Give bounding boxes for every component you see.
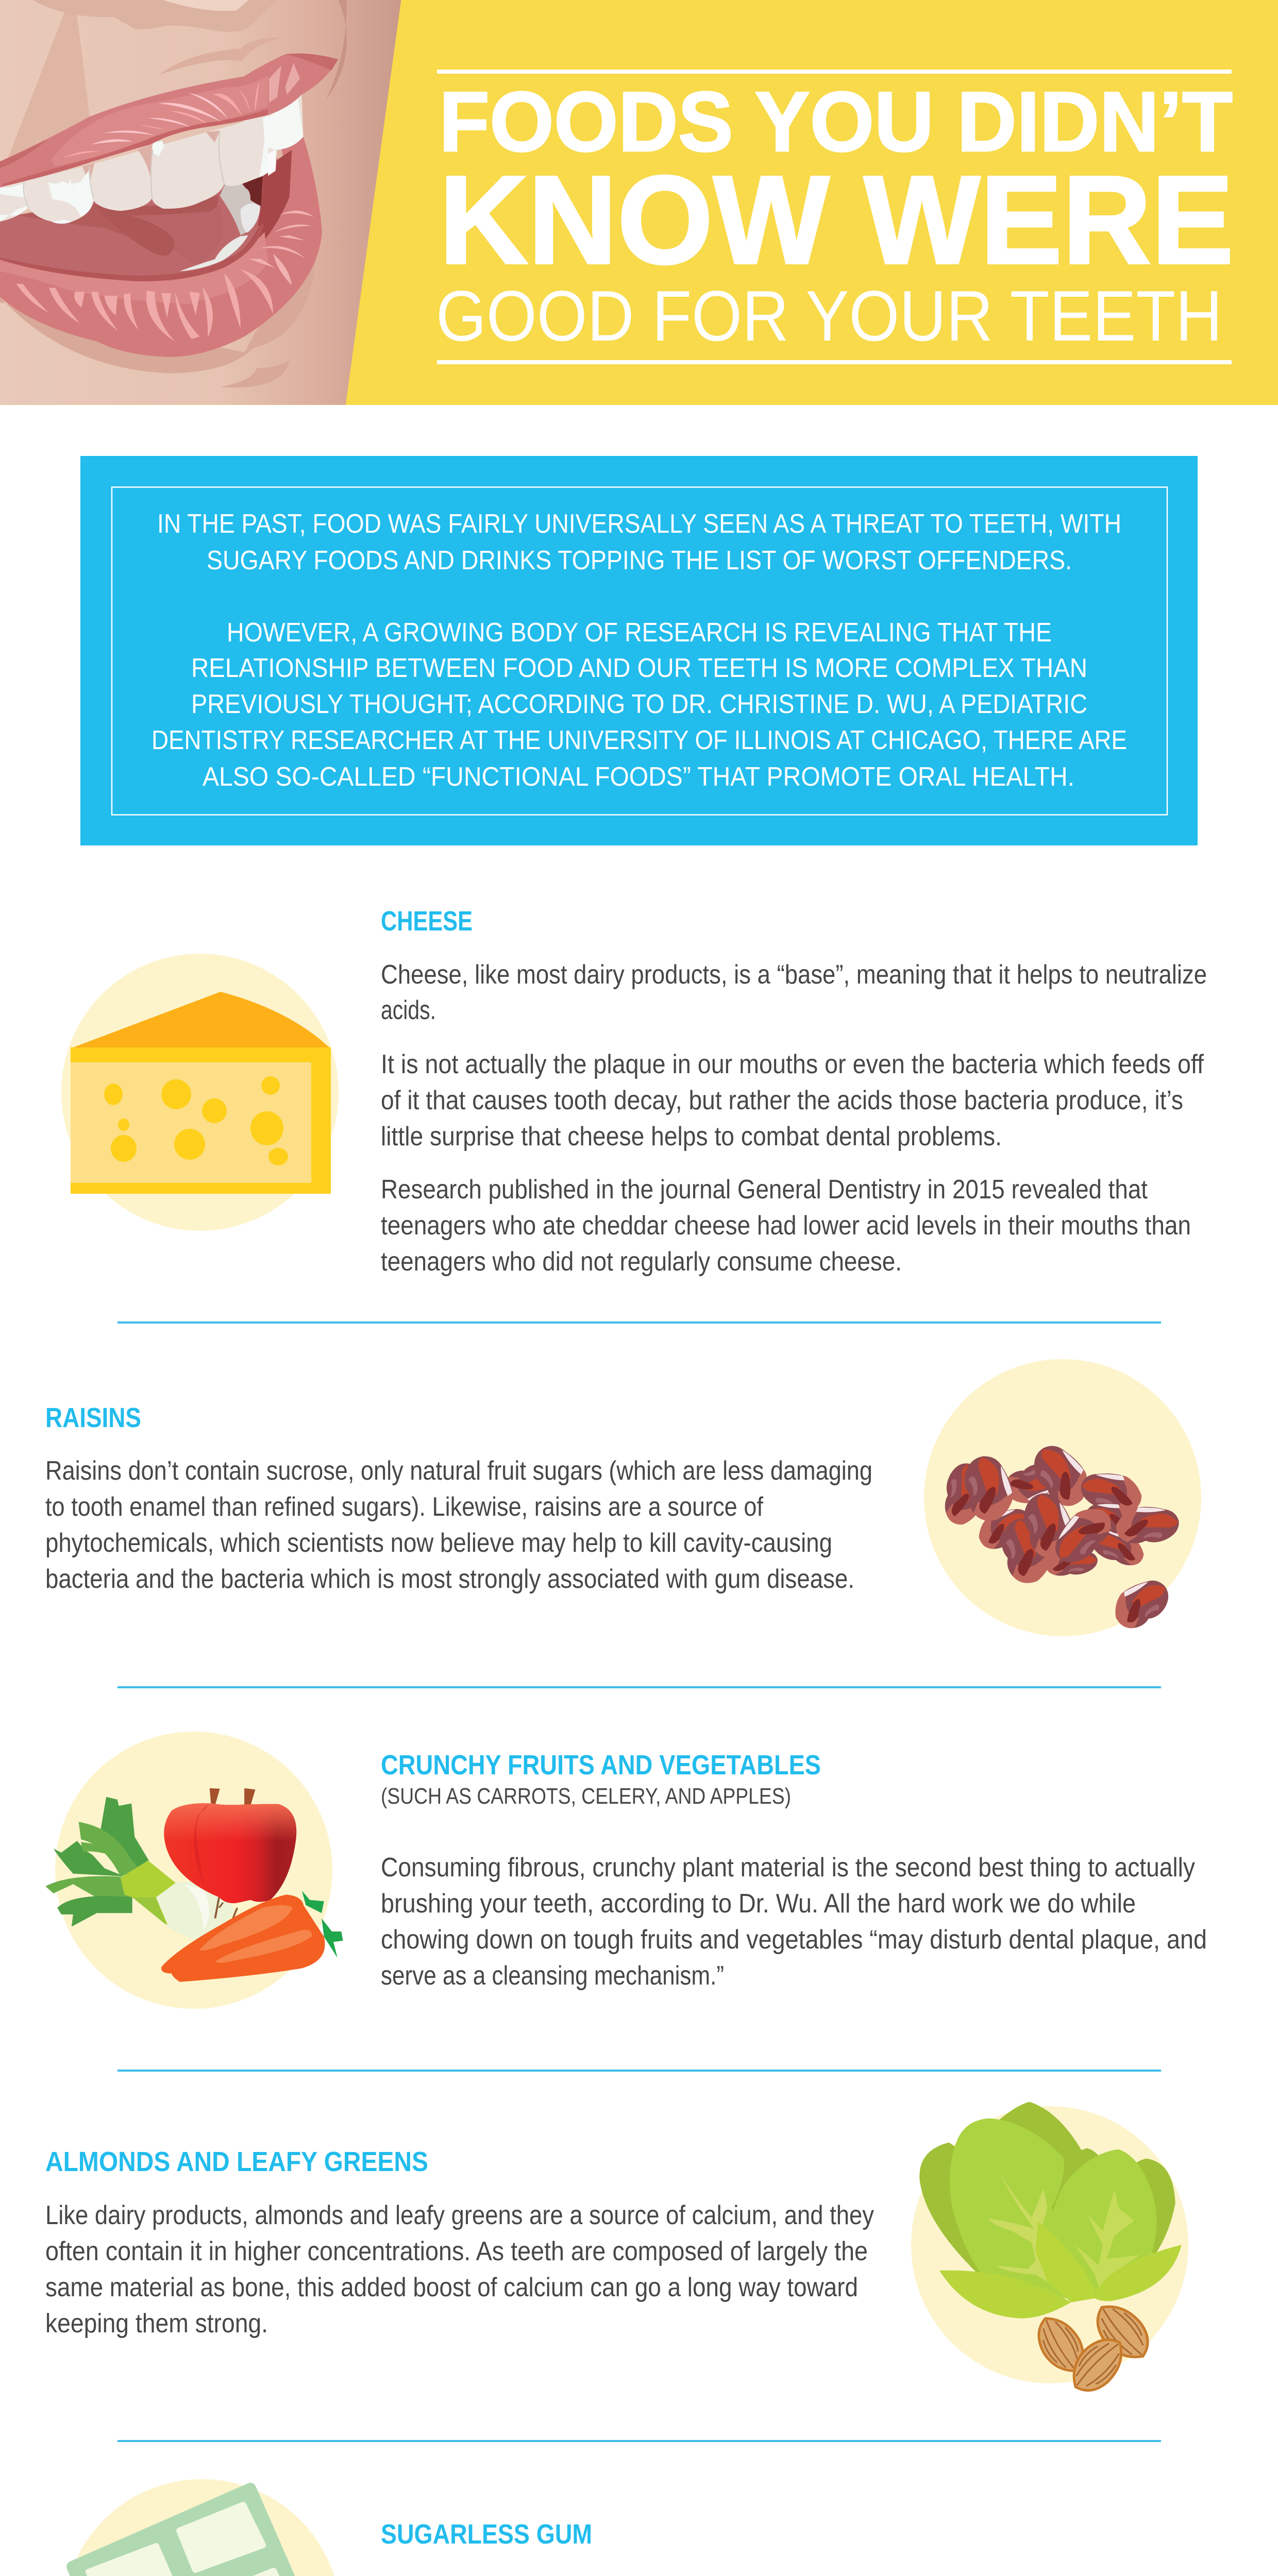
header banner: [0, 0, 1278, 405]
intro text: PREVIOUSLY THOUGHT; ACCORDING TO DR. CHRISTINE D. WU, A PEDIATRIC: [191, 689, 1087, 719]
intro text: HOWEVER, A GROWING BODY OF RESEARCH IS REVEALING THAT THE: [227, 618, 1052, 648]
text: cheese: Research published in the journal General Dentistry in 2015 revealed that: [381, 1175, 1148, 1205]
heading: crunchy fruits and vegetables: CRUNCHY FRUITS AND VEGETABLES: [381, 1750, 821, 1781]
intro text: ALSO SO-CALLED “FUNCTIONAL FOODS” THAT PROMOTE ORAL HEALTH.: [203, 762, 1074, 792]
icon: apple, celery and carrot: [45, 1732, 343, 2009]
text: raisins: phytochemicals, which scientists now believe may help to kill cavity-causing: [45, 1528, 832, 1558]
text: crunchy: Consuming fibrous, crunchy plant material is the second best thing to actually: [381, 1853, 1195, 1883]
section: crunchy fruits and vegetables: [45, 1732, 1207, 2009]
icon: raisins: [924, 1359, 1201, 1637]
text: almonds: keeping them strong.: [45, 2309, 268, 2338]
text: crunchy: brushing your teeth, according to Dr. Wu. All the hard work we do while: [381, 1889, 1136, 1919]
text: cheese: teenagers who ate cheddar cheese had lower acid levels in their mouths than: [381, 1211, 1191, 1241]
text: raisins: bacteria and the bacteria which is most strongly associated with gum disease.: [45, 1564, 854, 1594]
icon: cheese: [61, 954, 339, 1231]
title: KNOW WERE: [439, 149, 1234, 290]
text: raisins: to tooth enamel than refined sugars). Likewise, raisins are a source of: [45, 1492, 763, 1522]
text: cheese: [381, 960, 1207, 1277]
intro text: RELATIONSHIP BETWEEN FOOD AND OUR TEETH IS MORE COMPLEX THAN: [191, 653, 1087, 683]
text: almonds: same material as bone, this added boost of calcium can go a long way toward: [45, 2273, 858, 2302]
yellow title background: [0, 0, 1278, 405]
intro text: [152, 509, 1127, 792]
text: cheese: of it that causes tooth decay, but rather the acids those bacteria produce, it’s: [381, 1086, 1183, 1115]
icon: gum packet: [63, 2479, 341, 2576]
text: almonds: often contain it in higher concentrations. As teeth are composed of largely the: [45, 2236, 868, 2266]
text: cheese: It is not actually the plaque in our mouths or even the bacteria which feeds off: [381, 1049, 1204, 1079]
intro text: SUGARY FOODS AND DRINKS TOPPING THE LIST OF WORST OFFENDERS.: [207, 546, 1072, 575]
text: crunchy: chowing down on tough fruits and vegetables “may disturb dental plaque, and: [381, 1925, 1207, 1955]
illustration: smiling mouth: [0, 0, 401, 405]
text: cheese: acids.: [381, 995, 436, 1025]
text: cheese: teenagers who did not regularly consume cheese.: [381, 1247, 902, 1277]
intro text: IN THE PAST, FOOD WAS FAIRLY UNIVERSALLY SEEN AS A THREAT TO TEETH, WITH: [157, 509, 1121, 539]
heading: almonds and leafy greens: ALMONDS AND LEAFY GREENS: [45, 2146, 428, 2177]
icon: leafy greens and almonds: [911, 2102, 1188, 2400]
intro panel: [80, 456, 1198, 845]
section: sugarless gum: [63, 2479, 1222, 2576]
intro text: DENTISTRY RESEARCHER AT THE UNIVERSITY OF ILLINOIS AT CHICAGO, THERE ARE: [152, 725, 1127, 755]
heading: raisins: RAISINS: [45, 1402, 141, 1433]
heading: sugarless gum: SUGARLESS GUM: [381, 2519, 592, 2550]
text: raisins: [45, 1456, 872, 1594]
bottom title rule: [437, 360, 1232, 364]
section: almonds and leafy greens: [45, 2102, 1188, 2400]
text: almonds: [45, 2200, 874, 2338]
subheading: (SUCH AS CARROTS, CELERY, AND APPLES): [381, 1784, 791, 1809]
title: FOODS YOU DIDN’T: [439, 74, 1233, 169]
text: raisins: Raisins don’t contain sucrose, only natural fruit sugars (which are less damaging: [45, 1456, 872, 1486]
heading: cheese: CHEESE: [381, 906, 473, 937]
section: raisins: [45, 1359, 1201, 1637]
text: almonds: Like dairy products, almonds and leafy greens are a source of calcium, and they: [45, 2200, 874, 2230]
top title rule: [437, 70, 1232, 74]
section: cheese: [61, 906, 1207, 1277]
title: [436, 74, 1234, 356]
text: crunchy: [381, 1853, 1207, 1991]
text: crunchy: serve as a cleansing mechanism.”: [381, 1961, 724, 1991]
text: cheese: little surprise that cheese helps to combat dental problems.: [381, 1122, 1002, 1151]
